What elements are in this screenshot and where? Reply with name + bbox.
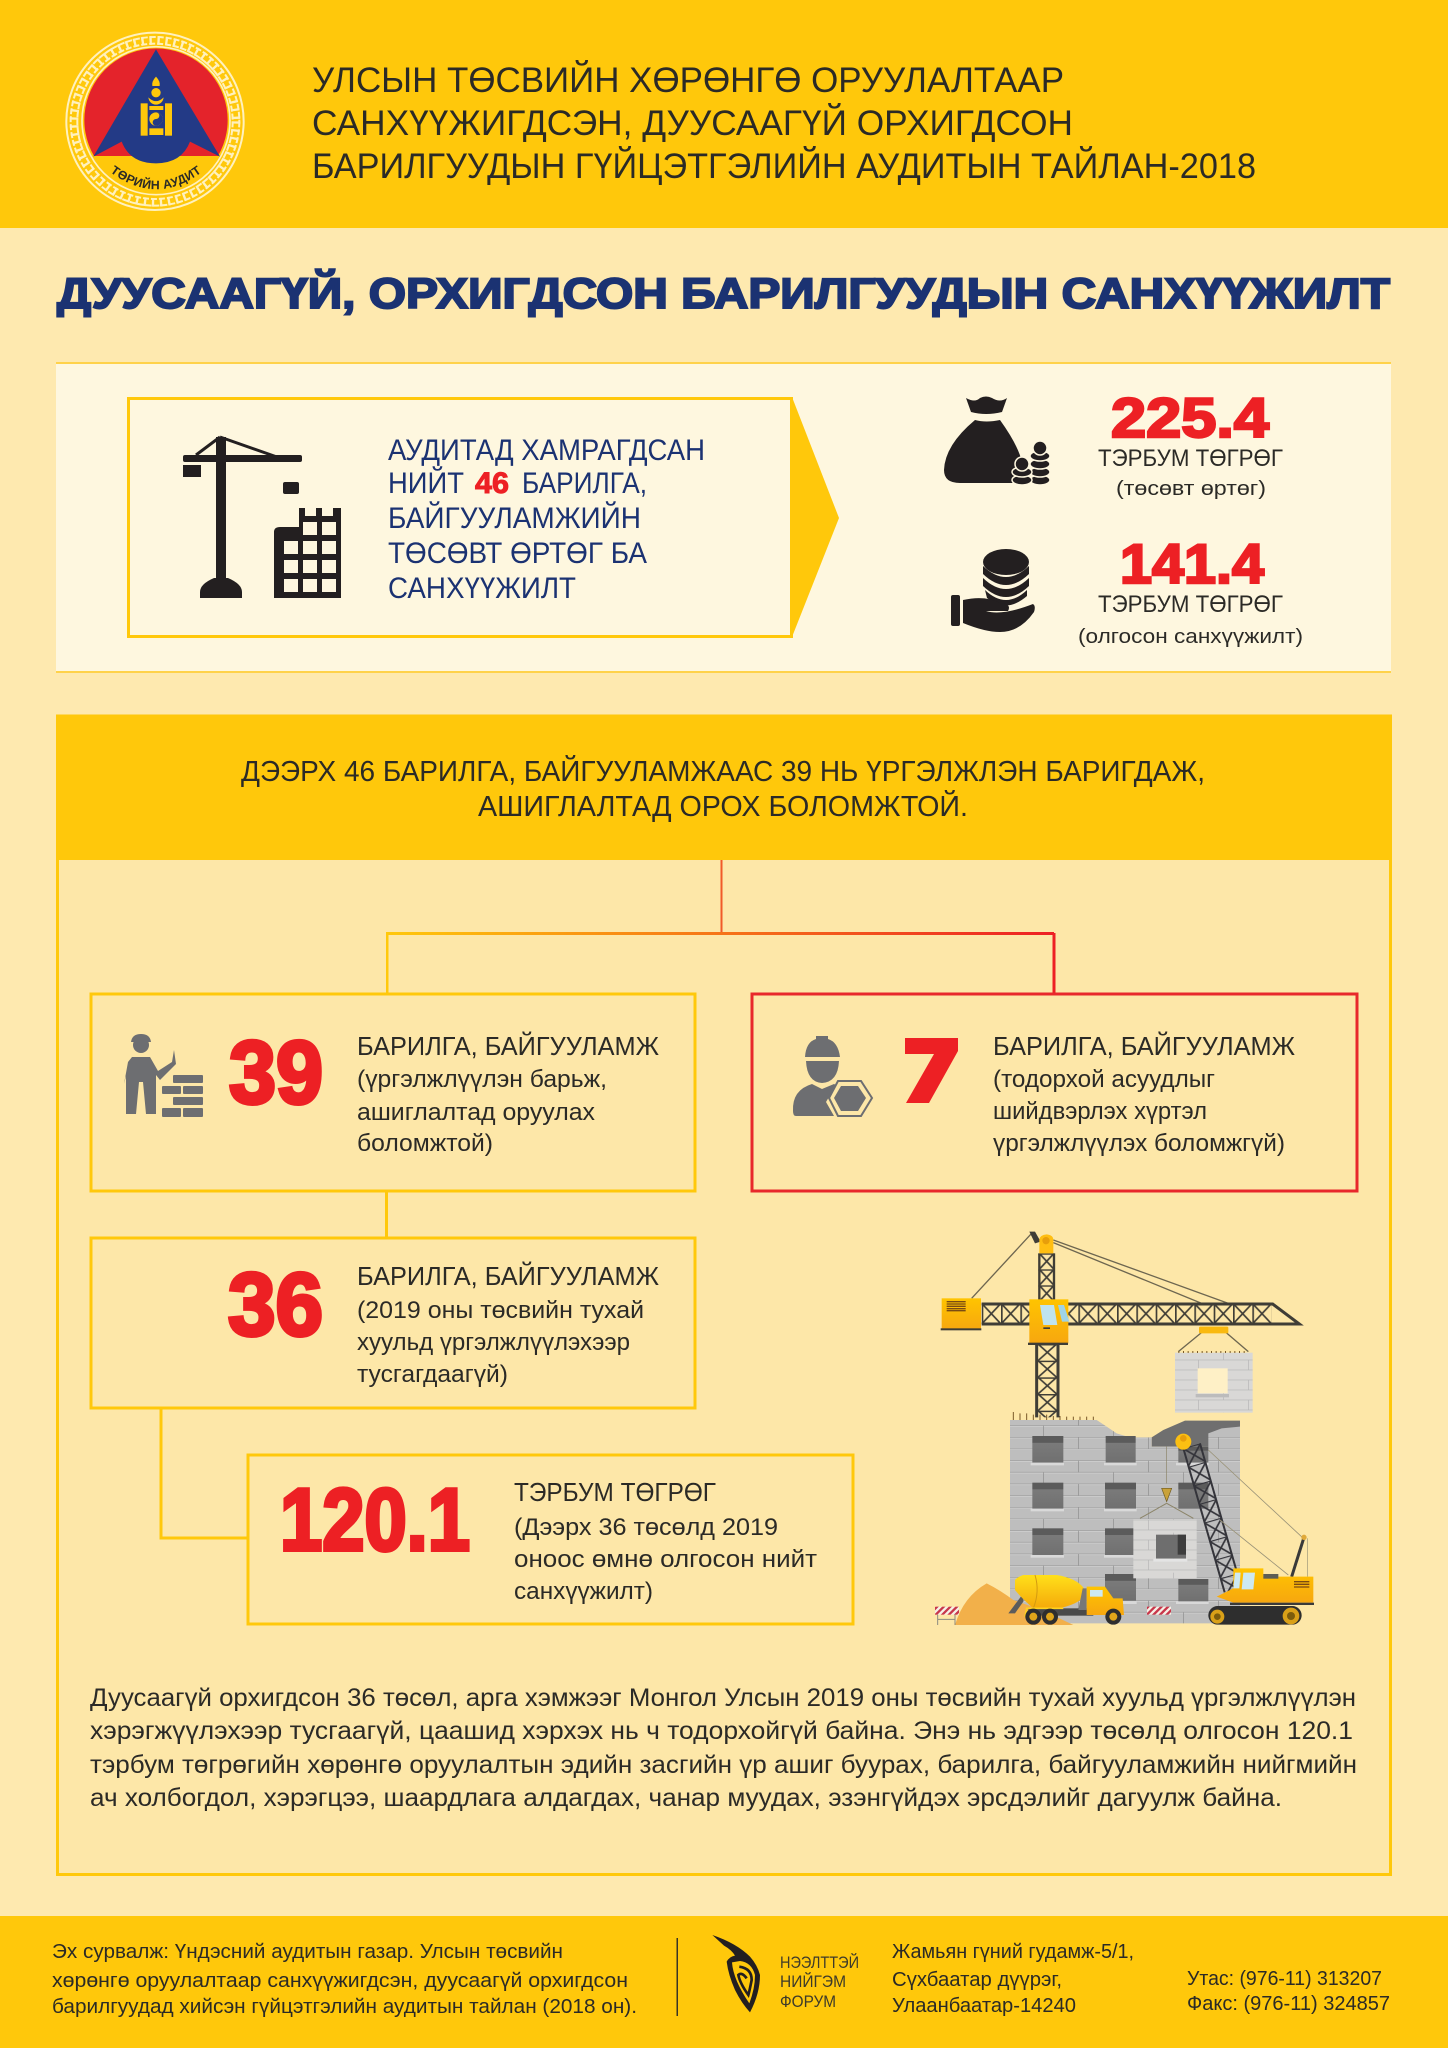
scope text: БАРИЛГА, — [522, 467, 647, 500]
numeral: 7 — [905, 1038, 958, 1103]
sand pile — [955, 1583, 1073, 1625]
card: 120.1 billion: ТЭРБУМ ТӨГРӨГ — [514, 1477, 716, 1507]
card: 39 buildings: боломжтой) — [357, 1130, 493, 1157]
figure: total budget: ТЭРБУМ ТӨГРӨГ — [1098, 445, 1283, 472]
logo: state audit emblem: ТӨРИЙН АУДИТ — [112, 165, 200, 190]
illustration: construction site — [935, 1232, 1314, 1625]
conclusion paragraph: хэрэгжүүлэхээр тусгаагүй, цаашид хэрхэх нь ч тодорхойгүй байна. Энэ нь эдгээр төсөлд олгосон 120.1 — [90, 1717, 1353, 1745]
card: 7 buildings: (тодорхой асуудлыг — [993, 1066, 1215, 1093]
card: 36 buildings: БАРИЛГА, БАЙГУУЛАМЖ — [357, 1261, 659, 1291]
card: 39 buildings — [91, 994, 695, 1191]
icon: hand holding coins — [951, 549, 1035, 632]
figure: total budget: 225.4 — [1111, 386, 1269, 449]
logo: state audit emblem — [65, 32, 245, 211]
logo: open society forum: НЭЭЛТТЭЙ — [780, 1953, 859, 1972]
figure: received financing — [1078, 532, 1303, 648]
icon: tower crane and building — [183, 437, 341, 598]
conclusion paragraph: тэрбум төгрөгийн хөрөнгө оруулалтын эдийн засгийн үр ашиг буурах, барилга, байгууламжийн нийгмийн — [90, 1751, 1357, 1779]
building — [1010, 1412, 1240, 1623]
card: 7 buildings: шийдвэрлэх хүртэл — [993, 1098, 1207, 1125]
section heading: ДУУСААГҮЙ, ОРХИГДСОН БАРИЛГУУДЫН САНХҮҮЖИЛТ — [57, 269, 1390, 318]
icon: money bag with coins — [944, 396, 1050, 485]
figure: received financing: ТЭРБУМ ТӨГРӨГ — [1098, 591, 1283, 618]
crawler crane — [1175, 1434, 1314, 1625]
logo: open society forum: НИЙГЭМ — [780, 1972, 846, 1991]
source note: Эх сурвалж: Үндэсний аудитын газар. Улсын төсвийн — [52, 1941, 563, 1963]
conclusion paragraph — [90, 1684, 1357, 1812]
icon: bricklayer — [124, 1034, 203, 1117]
address: Жамьян гүний гудамж-5/1, — [892, 1941, 1134, 1963]
source note — [52, 1941, 637, 2018]
panel head band — [56, 715, 1391, 860]
hanging wall panel — [1175, 1327, 1253, 1413]
source note: хөрөнгө оруулалтаар санхүүжигдсэн, дуусаагүй орхигдсон — [52, 1970, 628, 1992]
card: 39 buildings: 39 — [229, 1022, 323, 1122]
contact: Утас: (976-11) 313207 — [1187, 1968, 1382, 1990]
tree connectors — [161, 860, 1056, 1538]
logo: open society forum — [712, 1935, 859, 2012]
card: 120.1 billion: санхүүжилт) — [514, 1578, 653, 1605]
card: 39 buildings: (үргэлжлүүлэн барьж, — [357, 1066, 607, 1093]
card: 39 buildings: БАРИЛГА, БАЙГУУЛАМЖ — [357, 1031, 659, 1061]
panel head band: АШИГЛАЛТАД ОРОХ БОЛОМЖТОЙ. — [478, 789, 968, 823]
scope text — [388, 434, 705, 605]
header title: УЛСЫН ТӨСВИЙН ХӨРӨНГӨ ОРУУЛАЛТААР — [312, 60, 1064, 100]
contact: Факс: (976-11) 324857 — [1187, 1993, 1390, 2015]
tower crane — [941, 1232, 1299, 1417]
header title: БАРИЛГУУДЫН ГҮЙЦЭТГЭЛИЙН АУДИТЫН ТАЙЛАН-2018 — [312, 146, 1256, 186]
scope text: БАЙГУУЛАМЖИЙН — [388, 501, 641, 535]
conclusion paragraph: Дуусаагүй орхигдсон 36 төсөл, арга хэмжээг Монгол Улсын 2019 оны төсвийн тухай хуульд үргэлжлүүлэн — [90, 1684, 1356, 1712]
address — [892, 1941, 1134, 2017]
card: 36 buildings: хуульд үргэлжлүүлэхээр — [357, 1329, 630, 1356]
source note: барилгуудад хийсэн гүйцэтгэлийн аудитын тайлан (2018 он). — [52, 1996, 637, 2018]
card: 7 buildings: БАРИЛГА, БАЙГУУЛАМЖ — [993, 1031, 1295, 1061]
scope text: ТӨСӨВТ ӨРТӨГ БА — [388, 537, 647, 570]
panel: breakdown of 46 projects — [56, 715, 1391, 1874]
address: Улаанбаатар-14240 — [892, 1995, 1076, 2017]
card: 36 buildings — [91, 1238, 695, 1408]
panel: audit scope summary — [56, 362, 1391, 673]
card: 120.1 billion: 120.1 — [280, 1470, 470, 1569]
scope text: САНХҮҮЖИЛТ — [388, 572, 576, 605]
conclusion paragraph: ач холбогдол, хэрэгцээ, шаардлага алдагдах, чанар муудах, эзэнгүйдэх эрсдэлийг дагуулж байна. — [90, 1784, 1282, 1812]
figure: total budget — [1098, 386, 1283, 500]
card: 7 buildings — [752, 994, 1357, 1191]
figure: total budget: (төсөвт өртөг) — [1116, 478, 1266, 500]
address: Сүхбаатар дүүрэг, — [892, 1969, 1062, 1991]
header title — [312, 60, 1256, 186]
scope text: НИЙТ — [388, 466, 464, 500]
contact — [1187, 1968, 1390, 2015]
panel head band: ДЭЭРХ 46 БАРИЛГА, БАЙГУУЛАМЖААС 39 НЬ ҮРГЭЛЖЛЭН БАРИГДАЖ, — [241, 754, 1205, 788]
header band — [0, 0, 1448, 228]
card: 36 buildings: 36 — [228, 1254, 323, 1354]
card: 120.1 billion: (Дээрх 36 төсөлд 2019 — [514, 1514, 778, 1541]
card: 39 buildings: ашиглалтад оруулах — [357, 1099, 595, 1126]
arrow — [792, 397, 839, 637]
card: 36 buildings: (2019 оны төсвийн тухай — [357, 1297, 644, 1324]
road barrier — [935, 1607, 1171, 1625]
figure: received financing: (олгосон санхүүжилт) — [1078, 626, 1303, 648]
scope box — [128, 398, 792, 636]
scope text: 46 — [475, 467, 509, 500]
header title: САНХҮҮЖИГДСЭН, ДУУСААГҮЙ ОРХИГДСОН — [312, 103, 1073, 143]
footer band — [0, 1916, 1448, 2048]
logo: open society forum: ФОРУМ — [780, 1992, 836, 2011]
card: 36 buildings: тусгагдаагүй) — [357, 1361, 508, 1388]
card: 120.1 billion: оноос өмнө олгосон нийт — [514, 1546, 817, 1573]
icon: worker with hex nut — [793, 1036, 872, 1116]
card: 120.1 billion — [248, 1455, 853, 1624]
figure: received financing: 141.4 — [1120, 532, 1264, 595]
card: 7 buildings: үргэлжлүүлэх боломжгүй) — [993, 1130, 1285, 1157]
scope text: АУДИТАД ХАМРАГДСАН — [388, 434, 705, 467]
concrete mixer truck — [1008, 1575, 1124, 1625]
